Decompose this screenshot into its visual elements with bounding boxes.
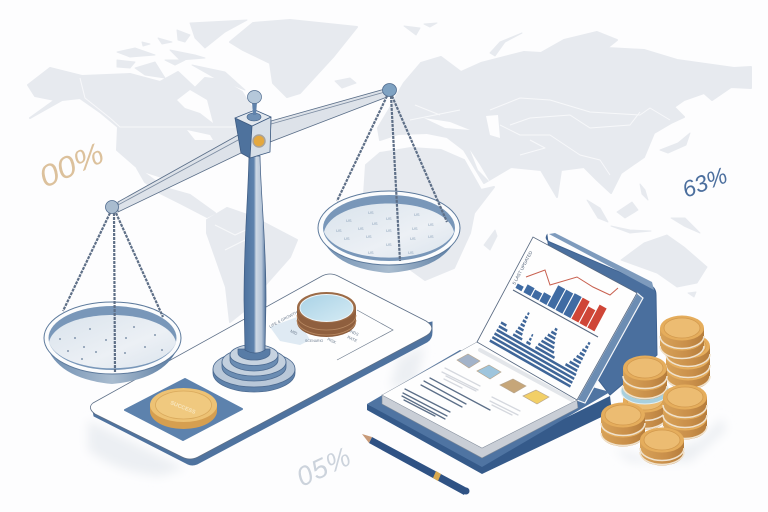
pan marks: US <box>386 228 392 233</box>
pan marks: US <box>346 218 352 223</box>
floor shadows <box>88 345 726 476</box>
bar chart baseline <box>513 290 598 337</box>
right beam <box>270 89 387 142</box>
beam highlights <box>118 92 385 205</box>
stand base <box>367 350 612 474</box>
balance scale <box>44 84 460 392</box>
sheet tinted area <box>270 317 310 345</box>
coin tile <box>125 379 242 440</box>
blue bars <box>515 267 582 318</box>
pan marks: US <box>372 221 378 226</box>
sheet microtext: RATE <box>347 334 358 343</box>
left beam end ball <box>106 200 118 214</box>
sheet microtext: RISK <box>327 336 337 345</box>
right pan <box>318 191 460 273</box>
book lower pages thickness <box>382 395 578 458</box>
base tiers <box>213 344 295 392</box>
pan marks: US <box>336 228 342 233</box>
map: Central America <box>137 168 215 217</box>
pan marks: US <box>368 250 374 255</box>
page text lines <box>402 368 520 419</box>
report on stand <box>367 233 657 474</box>
pan marks: US <box>386 242 392 247</box>
upper page <box>477 237 637 400</box>
map: Greenland <box>230 20 357 97</box>
pan marks: US <box>428 222 434 227</box>
colour swatches <box>457 354 549 404</box>
top knob <box>247 90 262 121</box>
stand back panel <box>546 235 657 395</box>
platform top <box>90 274 432 459</box>
divider band <box>480 350 572 400</box>
map: borders <box>80 78 670 250</box>
pan marks: US <box>344 236 350 241</box>
left chains <box>63 213 163 373</box>
pan marks: US <box>428 234 434 239</box>
map: Africa <box>364 148 494 280</box>
pan marks: US <box>412 226 418 231</box>
pan marks: US <box>368 210 374 215</box>
map: Arctic islands <box>117 20 356 90</box>
page stack right edge <box>577 293 643 403</box>
label: 00%: 00% <box>34 137 109 194</box>
pan dots <box>59 326 163 360</box>
middle stack <box>621 356 669 430</box>
pan marks: US <box>366 234 372 239</box>
map: North America <box>28 68 252 178</box>
front left stack <box>601 402 645 446</box>
left beam <box>118 134 241 212</box>
pivot gold bolt <box>253 135 265 147</box>
pencil <box>362 434 470 495</box>
magnifier <box>297 292 356 337</box>
pan marks: US <box>414 212 420 217</box>
right beam end ball <box>382 84 396 96</box>
right chains <box>337 96 447 261</box>
sheet microtext: LIFE & GROWTH <box>268 310 298 329</box>
pan marks <box>336 210 434 255</box>
pivot block <box>235 110 271 158</box>
coin stacks <box>601 316 710 466</box>
map: islands of Asia and Oceania <box>336 23 707 297</box>
pan marks: US <box>358 226 364 231</box>
pole <box>244 156 266 353</box>
sheet microtext: MID <box>290 328 298 336</box>
red bars <box>571 296 607 331</box>
stand edge highlight <box>549 233 654 290</box>
sheet microtext: SCENARIO <box>305 339 324 343</box>
map: Europe west <box>378 98 427 140</box>
bar chart <box>513 267 618 337</box>
map: South America <box>207 208 297 322</box>
page microtext: 5 LAST UPDATED <box>511 249 534 285</box>
world map <box>28 20 751 322</box>
trend line <box>526 270 618 295</box>
platform side <box>92 322 432 465</box>
gold coin: SUCCESS <box>169 400 196 416</box>
map: Eurasia <box>394 32 751 197</box>
pan marks: US <box>410 236 416 241</box>
front right stack <box>663 384 707 440</box>
pan marks: US <box>408 250 414 255</box>
platform <box>90 274 432 465</box>
sheet microtext: BONDS <box>345 326 360 337</box>
sheet outline <box>337 310 393 360</box>
left pan <box>44 302 181 384</box>
gold coin <box>150 388 217 429</box>
map: inland seas <box>177 90 500 182</box>
back stacks <box>660 316 710 390</box>
striped histogram <box>489 297 591 388</box>
pan marks: US <box>386 216 392 221</box>
lower page <box>382 342 577 448</box>
sheet microtext <box>268 310 360 345</box>
label: 05%: 05% <box>292 442 355 492</box>
label: 63%: 63% <box>678 162 731 203</box>
front small stack <box>640 428 684 466</box>
